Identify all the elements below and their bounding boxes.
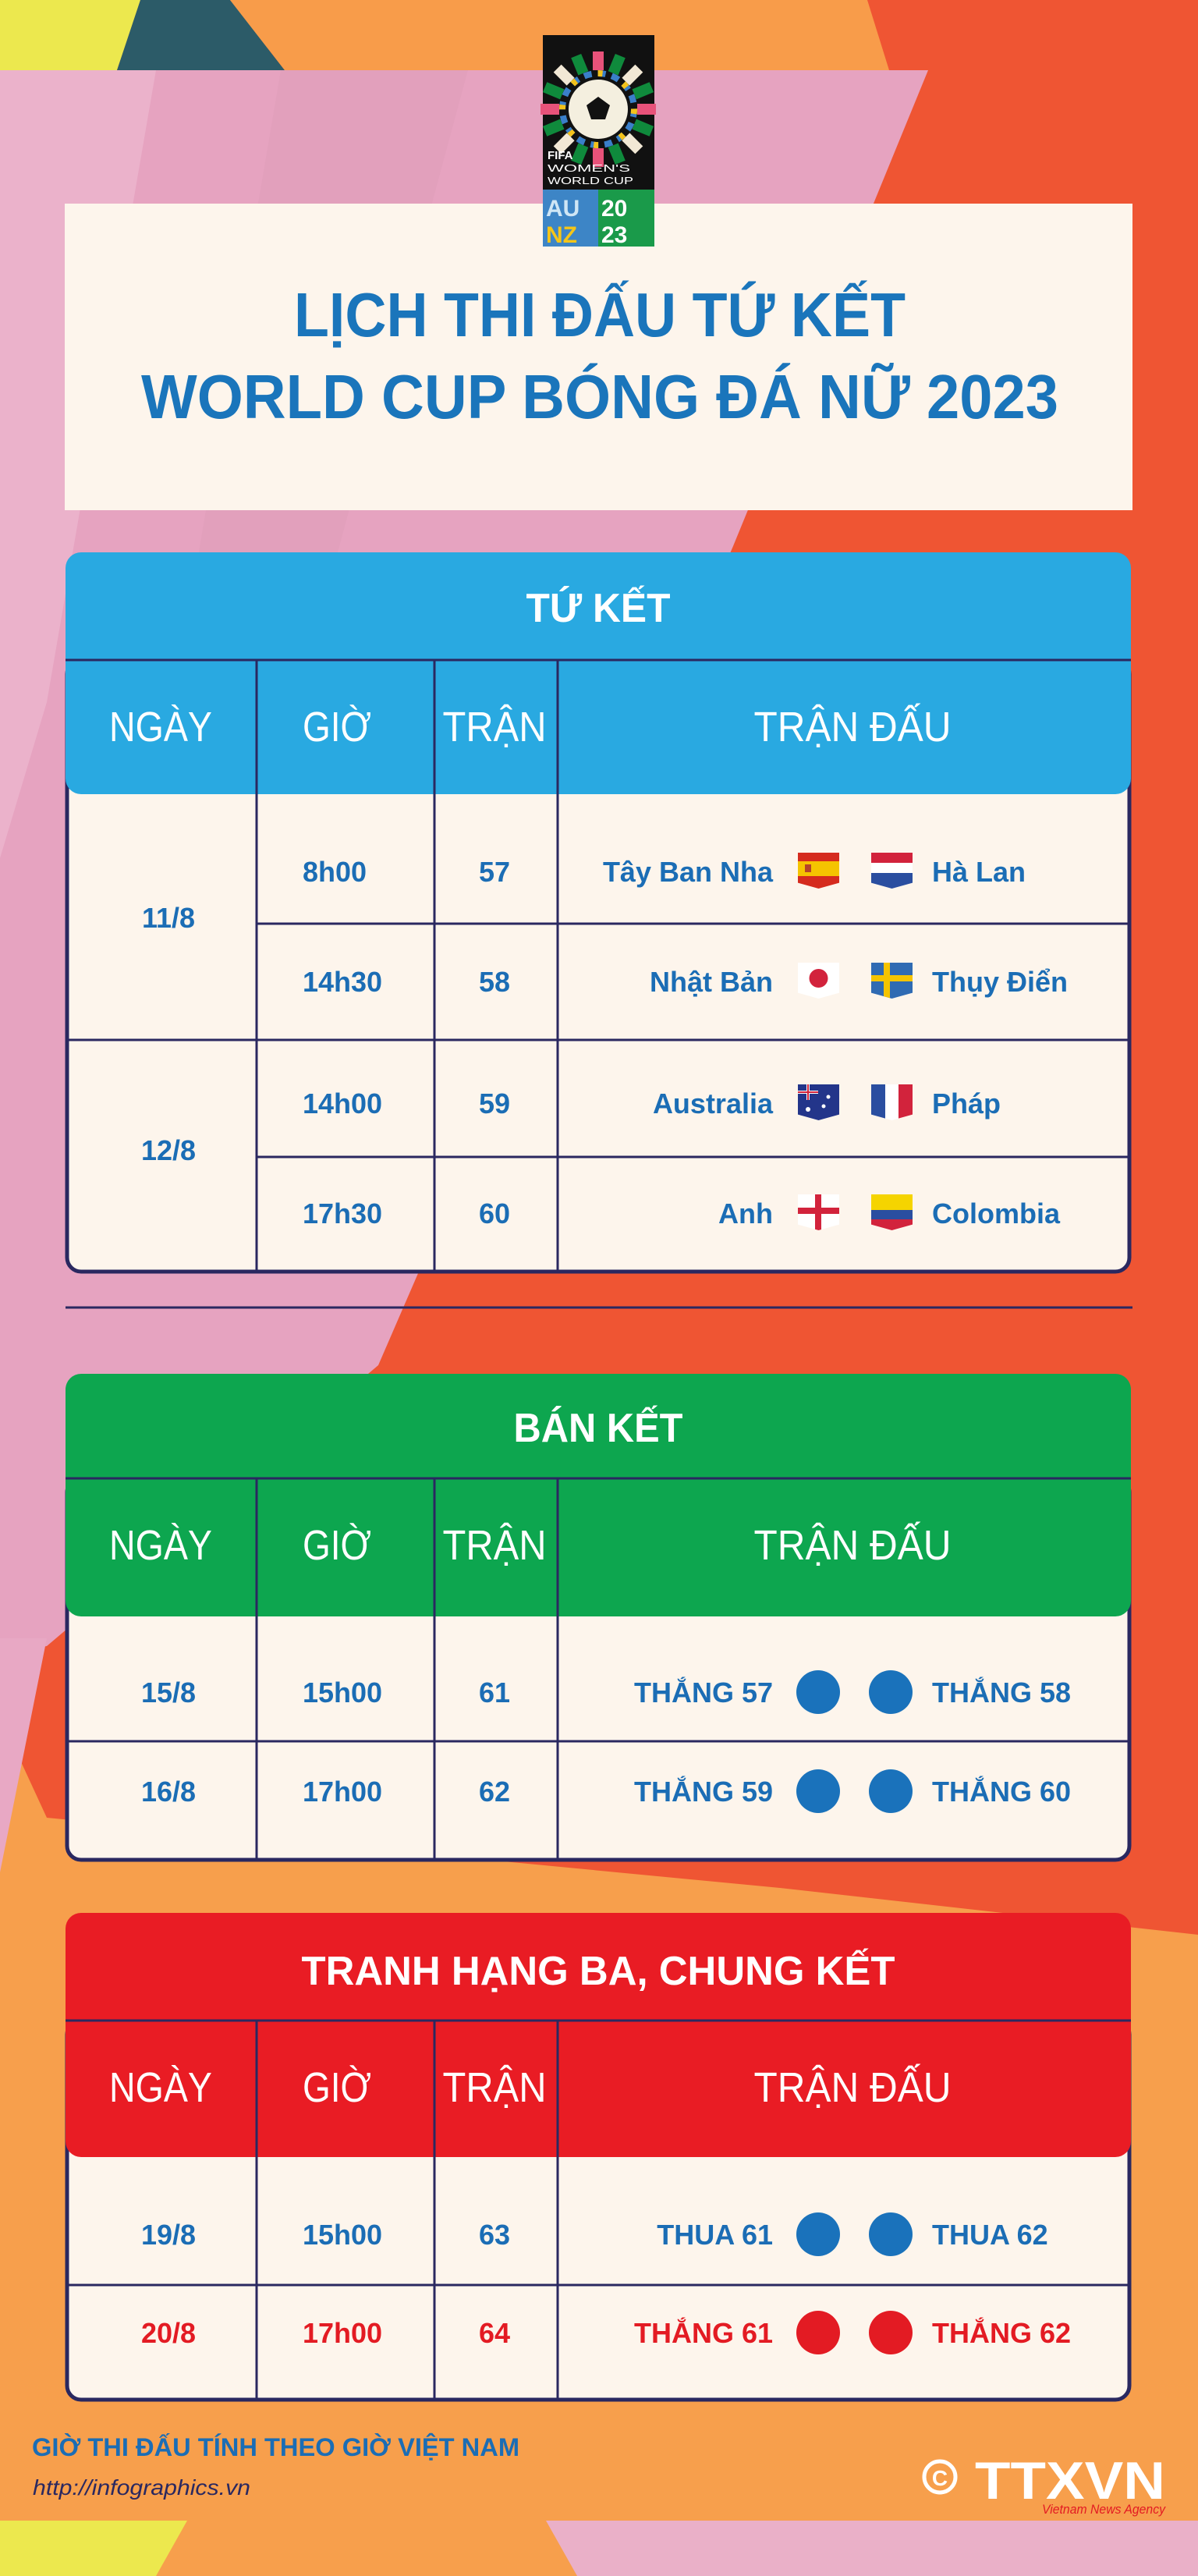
icon: flag Netherlands [871,853,913,889]
rows: Hà Lan [932,856,1026,888]
rows: 19/8 [141,2219,196,2251]
logo: FIFA Women's World Cup 2023: 23 [601,222,627,248]
logo: FIFA Women's World Cup 2023: FIFA [548,149,573,162]
rows: 17h00 [303,2317,382,2349]
rows [141,1670,1071,1813]
column headers: NGÀY [109,1522,212,1569]
panel: tứ kết [66,552,1131,1272]
footer url: http://infographics.vn [33,2475,250,2500]
rows: THẮNG 62 [932,2316,1071,2349]
rows: 61 [479,1677,510,1708]
rows: THẮNG 58 [932,1676,1071,1708]
column headers: NGÀY [109,704,212,750]
rows: 58 [479,966,510,998]
rows: 64 [479,2317,510,2349]
rows [141,2212,1071,2354]
rows: 57 [479,856,510,888]
title box [65,204,1132,510]
logo: TTXVN: C [932,2466,948,2490]
logo: FIFA Women's World Cup 2023: 20 [601,196,627,222]
column headers [109,2064,952,2111]
logo: FIFA Women's World Cup 2023 [541,35,656,248]
icon: flag Spain [798,853,839,889]
logo: FIFA Women's World Cup 2023: AU [546,196,580,222]
rows: 15h00 [303,1677,382,1708]
title: LỊCH THI ĐẤU TỨ KẾT [294,280,906,349]
rows: 20/8 [141,2317,196,2349]
column headers: NGÀY [109,2064,212,2111]
rows: 60 [479,1198,510,1229]
rows: 16/8 [141,1776,196,1808]
rows: 15/8 [141,1677,196,1708]
icon: flag Japan [798,963,839,999]
rows: Australia [653,1088,774,1119]
rows: THẮNG 61 [634,2316,773,2349]
heading: BÁN KẾT: BÁN KẾT [513,1405,683,1451]
rows: 8h00 [303,856,367,888]
panel: tranh hạng ba, chung kết [66,1913,1131,2400]
column headers: GIỜ [303,2064,371,2111]
rows: 15h00 [303,2219,382,2251]
rows: THUA 61 [657,2219,773,2251]
heading: TỨ KẾT: TỨ KẾT [526,585,671,631]
column headers: GIỜ [303,1522,371,1569]
rows: 12/8 [141,1134,196,1166]
rows: Nhật Bản [650,966,773,998]
rows: THUA 62 [932,2219,1048,2251]
logo: FIFA Women's World Cup 2023: WOMEN'S [548,162,631,174]
icon: flag France [871,1084,913,1120]
icon: flag Colombia [871,1194,913,1230]
rows: THẮNG 57 [634,1676,773,1708]
rows: THẮNG 60 [932,1775,1071,1808]
rows: 17h00 [303,1776,382,1808]
title [141,280,1058,431]
rows: Colombia [932,1198,1061,1229]
rows [141,856,1068,1229]
column headers [109,1522,952,1569]
logo: TTXVN: TTXVN [975,2451,1165,2510]
rows: 14h00 [303,1088,382,1119]
rows: 17h30 [303,1198,382,1229]
icon: flag England [798,1194,839,1230]
rows: Tây Ban Nha [603,856,774,888]
rows: 14h30 [303,966,382,998]
rows: 59 [479,1088,510,1119]
rows: Anh [718,1198,773,1229]
column headers: TRẬN ĐẤU [753,1522,952,1569]
column headers: TRẬN [443,1522,546,1569]
title: WORLD CUP BÓNG ĐÁ NỮ 2023 [141,362,1058,431]
logo: FIFA Women's World Cup 2023: WORLD CUP [548,175,633,186]
logo: TTXVN: Vietnam News Agency [1042,2502,1166,2517]
rows: 11/8 [142,902,195,934]
column headers: TRẬN ĐẤU [753,704,952,750]
rows: Pháp [932,1088,1001,1119]
column headers: TRẬN [443,704,546,750]
panel: bán kết [66,1374,1131,1860]
column headers [109,704,952,750]
column headers: TRẬN ĐẤU [753,2064,952,2111]
column headers: TRẬN [443,2064,546,2111]
column headers: GIỜ [303,704,371,750]
logo: FIFA Women's World Cup 2023: NZ [546,222,577,248]
rows: 63 [479,2219,510,2251]
logo: TTXVN [924,2451,1166,2517]
icon: flag Sweden [871,963,913,999]
footer note: GIỜ THI ĐẤU TÍNH THEO GIỜ VIỆT NAM [32,2433,519,2461]
icon: flag Australia [798,1084,839,1120]
heading: TRANH HẠNG BA, CHUNG KẾT: TRANH HẠNG BA, CHUNG KẾT [301,1948,895,1994]
rows: Thụy Điển [932,966,1068,998]
rows: 62 [479,1776,510,1808]
rows: THẮNG 59 [634,1775,773,1808]
